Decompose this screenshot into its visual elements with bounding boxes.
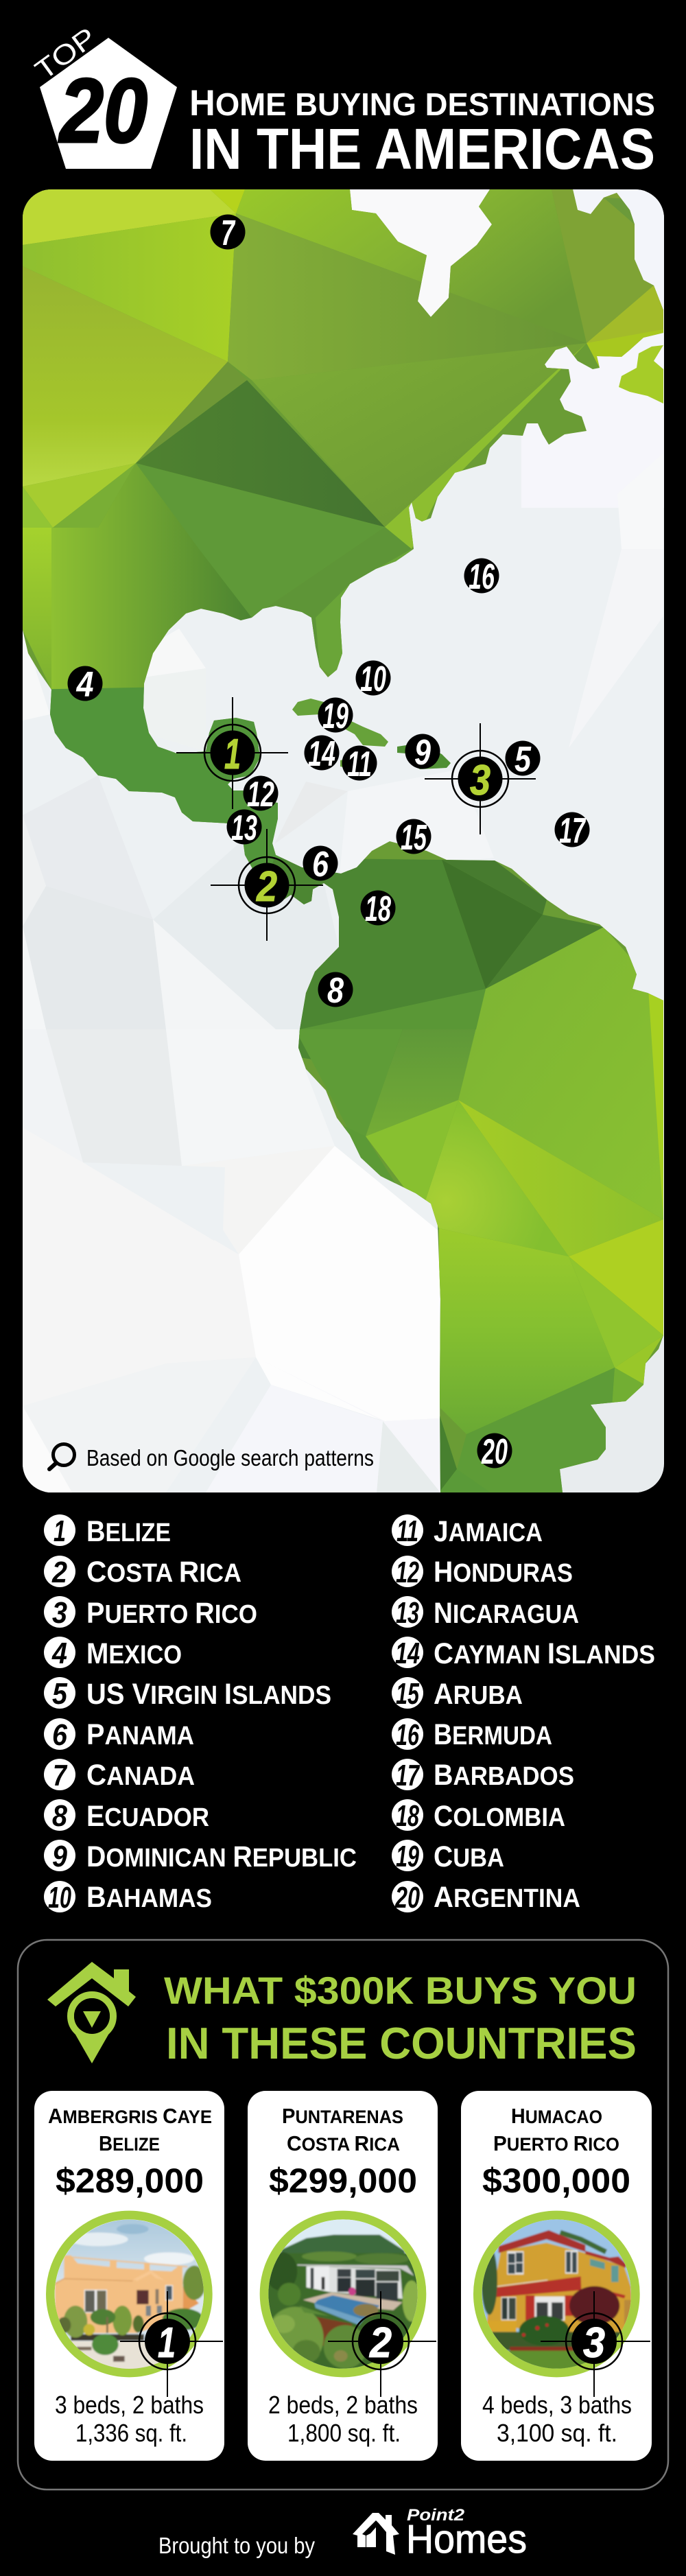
target marker 1: 1 bbox=[158, 2319, 176, 2367]
legend 16 Bermuda bbox=[392, 1718, 552, 1752]
land: Jamaica bbox=[340, 760, 343, 767]
price: $300,000 bbox=[482, 2162, 630, 2200]
legend 9 Dominican Republic: 9 bbox=[52, 1840, 67, 1873]
target marker 1 bbox=[120, 2291, 223, 2397]
marker 18 Colombia bbox=[361, 891, 395, 925]
specs bbox=[268, 2391, 418, 2447]
marker 11 Jamaica bbox=[342, 745, 377, 781]
photo: Humacao house bbox=[473, 2214, 643, 2376]
legend 10 Bahamas: 10 bbox=[48, 1881, 71, 1915]
marker 15 Aruba bbox=[397, 819, 431, 854]
legend 8 Ecuador: ECUADOR bbox=[86, 1800, 209, 1833]
card title: PUNTARENAS bbox=[282, 2104, 403, 2128]
target 3 Puerto Rico: 3 bbox=[470, 757, 490, 804]
legend 8 Ecuador bbox=[44, 1799, 209, 1833]
legend 15 Aruba: ARUBA bbox=[434, 1678, 523, 1711]
legend 19 Cuba: 19 bbox=[396, 1840, 419, 1873]
legend 6 Panama: PANAMA bbox=[86, 1718, 194, 1751]
marker 20 Argentina: 20 bbox=[481, 1432, 508, 1472]
legend 13 Nicaragua: 13 bbox=[396, 1596, 419, 1630]
target 1 Belize: 1 bbox=[224, 731, 241, 778]
legend 17 Barbados: 17 bbox=[396, 1759, 421, 1792]
legend 12 Honduras: 12 bbox=[396, 1556, 419, 1589]
search note: Based on Google search patterns bbox=[86, 1445, 374, 1471]
panel: map of the Americas bbox=[23, 189, 664, 1492]
marker 12 Honduras: 12 bbox=[247, 775, 274, 815]
marker 15 Aruba: 15 bbox=[401, 818, 427, 858]
legend 6 Panama: 6 bbox=[52, 1718, 67, 1752]
marker 8 Ecuador bbox=[318, 972, 353, 1007]
legend 6 Panama bbox=[44, 1718, 194, 1752]
marker 8 Ecuador: 8 bbox=[327, 971, 344, 1011]
marker 17 Barbados bbox=[554, 812, 590, 847]
legend 16 Bermuda: 16 bbox=[396, 1718, 419, 1752]
logo: Point2 Homes: Homes bbox=[406, 2517, 527, 2562]
legend 18 Colombia: 18 bbox=[396, 1799, 419, 1833]
legend 2 Costa Rica: COSTA RICA bbox=[86, 1556, 241, 1589]
marker 16 Bermuda bbox=[464, 559, 499, 593]
logo: Point2 Homes bbox=[353, 2506, 527, 2562]
legend 18 Colombia: COLOMBIA bbox=[434, 1800, 565, 1833]
land: Cuba bbox=[292, 699, 388, 747]
legend 8 Ecuador: 8 bbox=[52, 1799, 67, 1833]
legend 14 Cayman Islands: CAYMAN ISLANDS bbox=[434, 1637, 655, 1670]
marker 17 Barbados: 17 bbox=[559, 811, 586, 851]
card: Belize bbox=[34, 2091, 224, 2461]
header bbox=[29, 22, 655, 181]
specs: 3,100 sq. ft. bbox=[497, 2419, 617, 2447]
target marker 3 bbox=[541, 2291, 650, 2397]
legend 7 Canada bbox=[44, 1759, 195, 1792]
legend 7 Canada: 7 bbox=[53, 1759, 68, 1792]
title: HOME BUYING DESTINATIONS bbox=[189, 83, 655, 124]
card title bbox=[48, 2104, 212, 2155]
specs bbox=[55, 2391, 204, 2447]
badge: top 20 pentagon: 20 bbox=[58, 60, 147, 162]
target 2 Costa Rica bbox=[211, 829, 323, 941]
legend 11 Jamaica: JAMAICA bbox=[434, 1515, 543, 1548]
legend 19 Cuba bbox=[392, 1840, 504, 1873]
marker 14 Cayman Islands: 14 bbox=[308, 734, 335, 774]
marker 12 Honduras bbox=[243, 775, 279, 811]
card title: AMBERGRIS CAYE bbox=[48, 2104, 212, 2128]
specs: 4 beds, 3 baths bbox=[482, 2391, 632, 2419]
card: Puerto Rico bbox=[461, 2091, 652, 2461]
icon: magnifier bbox=[49, 1444, 74, 1469]
legend 19 Cuba: CUBA bbox=[434, 1840, 504, 1873]
badge: top 20 pentagon bbox=[29, 22, 177, 169]
legend 2 Costa Rica: 2 bbox=[51, 1556, 67, 1589]
legend 16 Bermuda: BERMUDA bbox=[434, 1718, 552, 1751]
target 2 Costa Rica: 2 bbox=[256, 863, 277, 911]
legend 1 Belize: 1 bbox=[54, 1514, 66, 1548]
marker 11 Jamaica: 11 bbox=[347, 745, 372, 784]
marker 16 Bermuda: 16 bbox=[469, 557, 495, 597]
marker 6 Panama: 6 bbox=[312, 845, 329, 885]
target 3 Puerto Rico bbox=[425, 723, 536, 834]
marker 14 Cayman Islands bbox=[305, 736, 339, 770]
legend list bbox=[44, 1514, 655, 1915]
legend 3 Puerto Rico: 3 bbox=[52, 1596, 67, 1630]
legend 3 Puerto Rico: PUERTO RICO bbox=[86, 1597, 257, 1630]
marker 4 Mexico bbox=[67, 666, 103, 701]
target marker 2 bbox=[328, 2291, 436, 2397]
legend 10 Bahamas: BAHAMAS bbox=[86, 1881, 212, 1914]
target marker 2: 2 bbox=[369, 2319, 392, 2367]
heading bbox=[164, 1969, 637, 2068]
target 1 Belize bbox=[176, 697, 288, 809]
photo: Puntarenas house bbox=[261, 2214, 425, 2374]
price: $289,000 bbox=[56, 2162, 204, 2200]
marker 9 Dominican Republic bbox=[405, 734, 440, 769]
card title: HUMACAO bbox=[511, 2104, 602, 2128]
legend 15 Aruba: 15 bbox=[396, 1677, 419, 1711]
title bbox=[189, 83, 655, 181]
marker 5 US Virgin Islands bbox=[505, 741, 541, 775]
legend 20 Argentina: ARGENTINA bbox=[434, 1881, 580, 1914]
card title: BELIZE bbox=[99, 2131, 160, 2155]
legend 15 Aruba bbox=[392, 1677, 523, 1711]
legend 7 Canada: CANADA bbox=[86, 1759, 195, 1792]
target marker 3: 3 bbox=[583, 2319, 605, 2367]
logo: Point2 Homes: Point2 bbox=[407, 2506, 465, 2525]
legend 4 Mexico: MEXICO bbox=[86, 1637, 182, 1670]
price: $299,000 bbox=[269, 2162, 417, 2200]
legend 9 Dominican Republic: DOMINICAN REPUBLIC bbox=[86, 1840, 357, 1873]
specs: 1,336 sq. ft. bbox=[75, 2419, 187, 2447]
marker 7 Canada bbox=[210, 214, 246, 250]
brought to you by: Brought to you by bbox=[158, 2533, 315, 2558]
legend 5 US Virgin Islands: 5 bbox=[52, 1677, 67, 1711]
legend 17 Barbados: BARBADOS bbox=[434, 1759, 574, 1792]
legend 1 Belize bbox=[44, 1514, 171, 1548]
land: Nova Scotia bbox=[619, 345, 663, 403]
card title: COSTA RICA bbox=[287, 2131, 400, 2155]
marker 20 Argentina bbox=[477, 1433, 512, 1468]
legend 5 US Virgin Islands: US VIRGIN ISLANDS bbox=[86, 1678, 331, 1711]
card title bbox=[493, 2104, 619, 2155]
land: Hispaniola bbox=[397, 743, 451, 769]
specs: 2 beds, 2 baths bbox=[268, 2391, 418, 2419]
specs: 1,800 sq. ft. bbox=[287, 2419, 401, 2447]
badge: top 20 pentagon: TOP bbox=[29, 22, 102, 86]
legend 4 Mexico: 4 bbox=[51, 1637, 67, 1670]
marker 6 Panama bbox=[303, 845, 338, 881]
marker 19 Cuba: 19 bbox=[322, 696, 348, 736]
marker 5 US Virgin Islands: 5 bbox=[514, 740, 532, 780]
marker 13 Nicaragua: 13 bbox=[231, 808, 257, 848]
marker 13 Nicaragua bbox=[226, 810, 262, 844]
icon: house and location pin bbox=[47, 1962, 136, 2063]
marker 7 Canada: 7 bbox=[221, 213, 235, 253]
card: Costa Rica bbox=[248, 2091, 438, 2461]
marker 4 Mexico: 4 bbox=[76, 665, 94, 705]
legend 10 Bahamas bbox=[44, 1881, 212, 1915]
legend 14 Cayman Islands: 14 bbox=[395, 1637, 420, 1670]
legend 20 Argentina: 20 bbox=[394, 1881, 420, 1915]
legend 1 Belize: BELIZE bbox=[86, 1515, 171, 1548]
heading: IN THESE COUNTRIES bbox=[166, 2018, 637, 2068]
marker 10 Bahamas: 10 bbox=[360, 659, 386, 699]
footer bbox=[158, 2506, 527, 2562]
marker 18 Colombia: 18 bbox=[365, 889, 391, 929]
marker 10 Bahamas bbox=[355, 660, 391, 696]
card title: PUERTO RICO bbox=[493, 2131, 619, 2155]
card title bbox=[282, 2104, 403, 2155]
legend 11 Jamaica bbox=[392, 1514, 543, 1548]
panel: what $300k buys you bbox=[18, 1940, 668, 2490]
photo: Ambergris Caye house bbox=[48, 2214, 213, 2374]
legend 4 Mexico bbox=[44, 1637, 182, 1670]
sea facets bbox=[23, 189, 664, 1492]
legend 12 Honduras: HONDURAS bbox=[434, 1556, 573, 1589]
specs: 3 beds, 2 baths bbox=[55, 2391, 204, 2419]
legend 13 Nicaragua: NICARAGUA bbox=[434, 1597, 579, 1630]
marker 19 Cuba bbox=[318, 697, 353, 733]
heading: WHAT $300K BUYS YOU bbox=[164, 1969, 637, 2012]
title: IN THE AMERICAS bbox=[189, 117, 655, 181]
specs bbox=[482, 2391, 632, 2447]
land facets: North, Central and South America bbox=[23, 189, 664, 1492]
marker 9 Dominican Republic: 9 bbox=[414, 733, 431, 773]
legend 11 Jamaica: 11 bbox=[397, 1514, 418, 1548]
